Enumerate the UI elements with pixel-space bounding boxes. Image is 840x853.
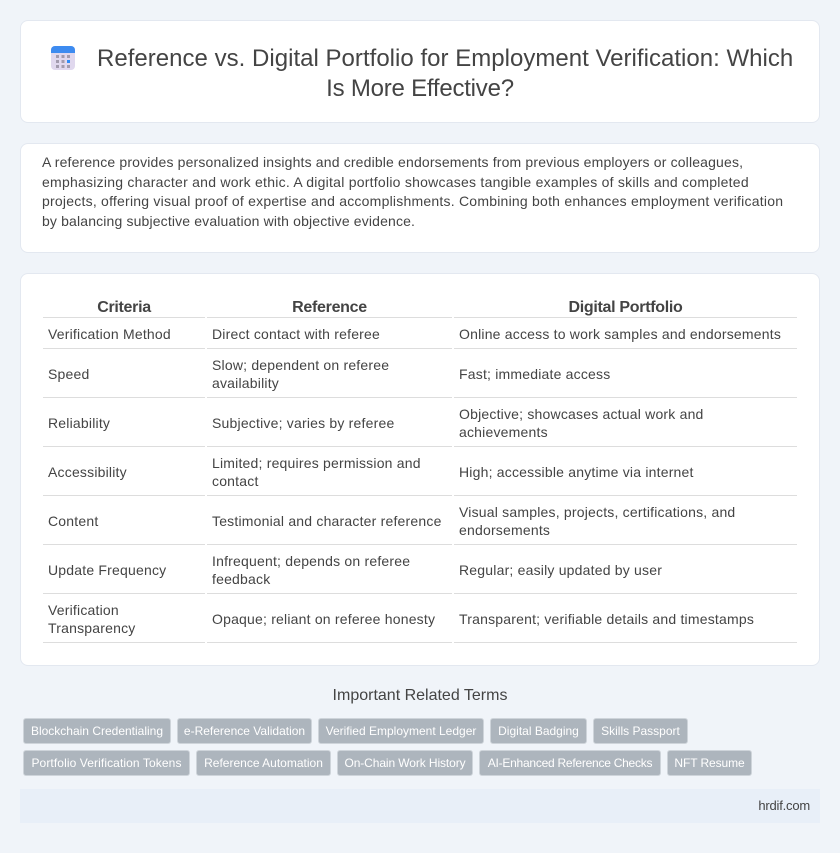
comparison table: Verification Transparency [48, 602, 135, 636]
comparison table [43, 299, 797, 643]
comparison table: Testimonial and character reference [212, 513, 442, 529]
comparison table: achievements [459, 424, 548, 440]
comparison table: Fast; immediate access [459, 366, 610, 382]
panel: intro paragraph [20, 143, 820, 253]
panel: intro paragraph: projects, offering visual proof of expertise and accomplishments. Combining both enhances employment verification [42, 193, 783, 209]
comparison table: Regular; easily updated by user [459, 562, 662, 578]
panel: intro paragraph: emphasizing character and work ethic. A digital portfolio showcases tangible examples of skills and completed [42, 174, 749, 190]
comparison table: Slow; dependent on referee availability [212, 357, 389, 391]
comparison table: Limited; requires permission and contact [212, 455, 421, 489]
panel: intro paragraph: A reference provides personalized insights and credible endorsements from previous employers or colleagues, [42, 154, 743, 170]
comparison table: Update Frequency [48, 562, 166, 578]
panel: comparison table [20, 273, 820, 666]
comparison table: Opaque; reliant on referee honesty [212, 611, 435, 627]
panel: intro paragraph: by balancing subjective evaluation with objective evidence. [42, 213, 415, 229]
related terms tags: Reference Automation [204, 756, 323, 770]
panel: title card [20, 20, 820, 123]
comparison table: Visual samples, projects, certifications, and [459, 504, 735, 520]
comparison table: Verification Method [48, 326, 171, 342]
title: Reference vs. Digital Portfolio for Employment Verification: Which [97, 45, 793, 72]
comparison table: Reference [292, 299, 367, 316]
comparison table: Criteria [97, 299, 151, 316]
comparison table: Accessibility [48, 464, 127, 480]
related terms tags: NFT Resume [674, 756, 745, 770]
comparison table: High; accessible anytime via internet [459, 464, 694, 480]
comparison table: Speed [48, 366, 89, 382]
comparison table: Online access to work samples and endorsements [459, 326, 781, 342]
icon: calendar [51, 46, 75, 70]
comparison table: Subjective; varies by referee [212, 415, 394, 431]
comparison table: Digital Portfolio [568, 299, 682, 316]
related terms tags: e-Reference Validation [184, 724, 305, 738]
comparison table: Reliability [48, 415, 110, 431]
related terms tags: Portfolio Verification Tokens [31, 756, 182, 770]
related terms tags [23, 718, 752, 776]
heading: related terms: Important Related Terms [333, 687, 507, 704]
related terms tags: Blockchain Credentialing [31, 724, 163, 738]
related terms tags: Skills Passport [601, 724, 680, 738]
related terms tags: AI-Enhanced Reference Checks [488, 756, 652, 770]
related terms tags: Verified Employment Ledger [326, 724, 476, 738]
comparison table: Content [48, 513, 98, 529]
comparison table: Infrequent; depends on referee feedback [212, 553, 410, 587]
footer [20, 789, 820, 823]
related terms tags: On-Chain Work History [344, 756, 466, 770]
footer: hrdif.com [758, 798, 810, 813]
title [97, 45, 793, 102]
comparison table: Direct contact with referee [212, 326, 380, 342]
related terms tags: Digital Badging [498, 724, 579, 738]
comparison table: Transparent; verifiable details and timestamps [459, 611, 754, 627]
title: Is More Effective? [326, 75, 514, 102]
comparison table: endorsements [459, 522, 550, 538]
comparison table: Objective; showcases actual work and [459, 406, 704, 422]
